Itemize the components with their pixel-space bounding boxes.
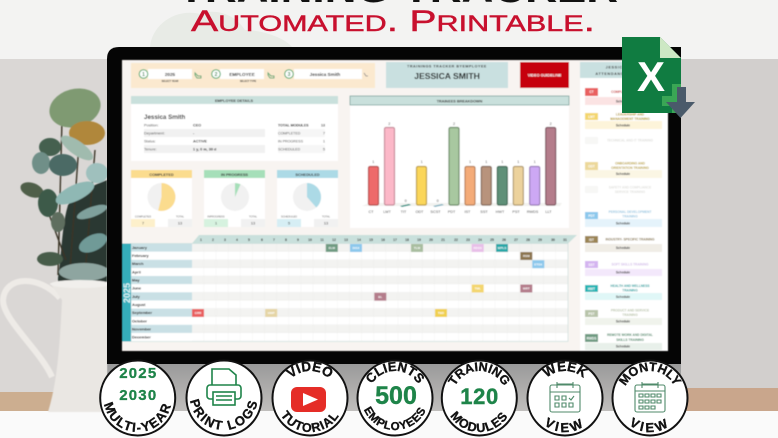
- panel: attendance list: HWT: [588, 287, 595, 291]
- panel: attendance list: Schedule: [616, 222, 630, 226]
- panel: yearly calendar: 18: [405, 238, 409, 242]
- panel: yearly calendar: September: [132, 310, 153, 315]
- chart: trainees breakdown: CT: [368, 210, 374, 214]
- panel: employee details: COMPLETED: [278, 132, 301, 136]
- badge: clients and employees: CLIENTS: [366, 362, 424, 383]
- panel: selector bar: 3: [288, 72, 291, 78]
- panel: attendance list: SOFT SKILLS TRAINING: [611, 262, 649, 266]
- badge: multi-year: 2025: [119, 365, 156, 382]
- panel: yearly calendar: 6: [261, 238, 263, 242]
- chart: trainees breakdown: LLT: [545, 210, 552, 214]
- panel: attendance list: Schedule: [616, 172, 630, 176]
- panel: employee details: TOTAL MODULES: [278, 124, 309, 128]
- badge: monthly view: VIEW: [632, 417, 667, 432]
- chart: trainees breakdown: TIT: [401, 210, 407, 214]
- panel: yearly calendar: 2: [212, 238, 214, 242]
- panel: yearly calendar: 8: [285, 238, 287, 242]
- panel: employee details: 1: [323, 140, 325, 144]
- panel: attendance list: ORIENTATION TRAINING: [611, 166, 649, 170]
- panel: yearly calendar: GRR: [195, 311, 202, 315]
- panel: attendance list: TRAINING: [622, 288, 638, 292]
- panel: employee details: 7: [323, 132, 325, 136]
- chart: trainees breakdown: LMT: [383, 210, 391, 214]
- panel: yearly calendar: February: [132, 253, 149, 258]
- badge: clients and employees: 500: [375, 382, 417, 410]
- panel: attendance list: SAFETY AND COMPLIANCE: [609, 186, 651, 190]
- panel: yearly calendar: 31: [563, 238, 567, 242]
- button: video guideline: VIDEO GUIDELINE: [528, 74, 562, 78]
- panel: yearly calendar: 25: [490, 238, 494, 242]
- panel: yearly calendar: 29: [538, 238, 542, 242]
- panel: attendance list: PRODUCT AND SERVICE: [611, 308, 649, 312]
- chart: trainees breakdown: 1: [534, 160, 536, 164]
- badge: training modules: MODULES: [450, 410, 507, 432]
- badge: monthly view: MONTHLY: [618, 362, 682, 386]
- chart: trainees breakdown: TRAINEES BREAKDOWN: [437, 100, 483, 104]
- panel: yearly calendar: 9: [297, 238, 299, 242]
- panel: yearly calendar: November: [132, 326, 152, 332]
- panel: attendance list: ATTENDANCE SUMMARY: [595, 72, 653, 76]
- panel: yearly calendar: WPLS: [498, 246, 506, 250]
- badge: week view: VIEW: [546, 417, 582, 432]
- panel: yearly calendar: January: [132, 245, 148, 250]
- panel: scheduled card: SCHEDULED: [295, 172, 320, 177]
- panel: yearly calendar: May: [132, 278, 140, 282]
- panel: yearly calendar: ELM: [329, 246, 335, 250]
- chart: trainees breakdown: 0: [437, 199, 439, 203]
- chart: trainees breakdown: 0: [405, 199, 407, 203]
- panel: selector bar: SELECT YEAR: [162, 80, 179, 83]
- panel: selector bar: SELECT TYPE: [240, 80, 257, 83]
- panel: attendance list: SKILLS TRAINING: [616, 338, 644, 342]
- panel: yearly calendar: June: [132, 286, 142, 290]
- panel: in progress card: INPROGRESS: [207, 214, 225, 218]
- panel: yearly calendar: 28: [526, 238, 530, 242]
- panel: attendance list: Schedule: [616, 295, 630, 299]
- badge: multi-year: [99, 360, 176, 436]
- panel: employee details: ACTIVE: [193, 140, 207, 144]
- panel: yearly calendar: 15: [369, 238, 373, 242]
- panel: yearly calendar: 14: [357, 238, 361, 242]
- panel: employee details: -: [193, 132, 195, 136]
- badge: print logs: [186, 360, 262, 436]
- chart: trainees breakdown: IST: [465, 210, 471, 214]
- chart: trainees breakdown: 2: [453, 122, 455, 126]
- panel: completed card: 13: [178, 222, 182, 226]
- panel: yearly calendar: TML: [475, 287, 481, 291]
- panel: yearly calendar: 2025: [122, 283, 132, 303]
- chart: trainees breakdown: 1: [517, 160, 519, 164]
- panel: yearly calendar: December: [132, 334, 151, 340]
- panel: completed card: COMPLETED: [135, 214, 151, 218]
- chart: trainees breakdown: PDT: [448, 210, 456, 214]
- badge: training modules: TRAINING: [448, 362, 510, 385]
- panel: attendance list: Schedule: [616, 320, 630, 324]
- panel: attendance list: LMT: [588, 115, 595, 119]
- panel: yearly calendar: TLM: [414, 246, 421, 250]
- subtitle: automated printable: A UTOMATED . P RINTABLE .: [191, 5, 595, 38]
- chart: trainees breakdown: 1: [469, 160, 471, 164]
- chart: trainees breakdown: 1: [501, 160, 503, 164]
- panel: employee details: CEO: [193, 124, 201, 128]
- panel: attendance list: Schedule: [616, 270, 630, 274]
- panel: yearly calendar: 3: [224, 238, 226, 242]
- panel: scheduled card: 5: [288, 222, 290, 226]
- panel: yearly calendar: March: [132, 261, 144, 266]
- panel: yearly calendar: ETDX: [534, 262, 542, 266]
- badge: clients and employees: [356, 360, 434, 436]
- panel: selector bar: 1: [142, 72, 145, 78]
- panel: attendance list: JESSICA SMITH: [606, 66, 642, 70]
- panel: attendance list: RWDS: [587, 336, 596, 340]
- panel: completed card: TOTAL: [176, 214, 185, 218]
- panel: yearly calendar: 7: [273, 238, 275, 242]
- chart: trainees breakdown: SST: [480, 210, 488, 214]
- panel: selector bar: EMPLOYEE: [229, 72, 255, 77]
- chart: trainees breakdown: 2: [388, 122, 390, 126]
- panel: completed card: 7: [142, 222, 144, 226]
- panel: yearly calendar: 19: [417, 238, 421, 242]
- panel: attendance list: PDT: [588, 214, 595, 218]
- badge: training modules: 120: [460, 384, 498, 409]
- panel: employee details: IN PROGRESS: [278, 140, 304, 144]
- panel: attendance list: Schedule: [616, 246, 630, 250]
- panel: yearly calendar: HWP: [268, 311, 275, 315]
- panel: selector bar: Jessica Smith: [310, 72, 341, 77]
- panel: attendance list: SERVICE TRAINING: [615, 190, 646, 194]
- panel: in progress card: 13: [251, 222, 255, 226]
- chart: trainees breakdown: [350, 96, 569, 228]
- panel: attendance list: Schedule: [616, 124, 630, 128]
- panel: attendance list: ODT: [588, 164, 595, 168]
- panel: attendance list: TECHNICAL AND IT TRAINING: [607, 138, 654, 142]
- panel: selector bar: [131, 63, 375, 88]
- dashboard screen: [122, 60, 668, 351]
- panel: yearly calendar: 27: [514, 238, 518, 242]
- panel: attendance list: HEALTH AND WELLNESS: [611, 284, 649, 288]
- panel: yearly calendar: 22: [454, 238, 458, 242]
- badge: print logs: PRINT LOGS: [190, 398, 257, 430]
- plant and white jug photo: [3, 83, 110, 412]
- heading: tracker by employee: TRAININGS TRACKER BYEMPLOYEE: [407, 64, 487, 68]
- badge: multi-year: MULTI-YEAR: [104, 402, 172, 432]
- panel: yearly calendar: 5: [248, 238, 250, 242]
- panel: yearly calendar: BL: [378, 295, 382, 299]
- panel: yearly calendar: 26: [502, 238, 506, 242]
- panel: yearly calendar: [122, 235, 577, 342]
- panel: attendance list: Schedule: [616, 100, 630, 104]
- panel: yearly calendar: July: [132, 294, 141, 299]
- badge: multi-year: 2030: [119, 387, 156, 404]
- panel: scheduled card: [277, 170, 338, 227]
- panel: scheduled card: 13: [324, 222, 328, 226]
- panel: attendance list: TRAINING: [622, 214, 638, 218]
- panel: yearly calendar: RDSS: [474, 246, 482, 250]
- panel: completed card: COMPLETED: [149, 172, 174, 177]
- panel: attendance list: [580, 62, 668, 351]
- badge: week view: WEEK: [542, 362, 588, 378]
- panel: attendance list: ONBOARDING AND: [615, 162, 646, 166]
- panel: yearly calendar: 24: [478, 238, 482, 242]
- panel: attendance list: INDUSTRY- SPECIFIC TRAINING: [606, 238, 655, 242]
- panel: in progress card: IN PROGRESS: [221, 172, 248, 177]
- panel: attendance list: TRAINING: [622, 313, 638, 317]
- panel: employee details: Position:: [144, 124, 159, 128]
- panel: employee details: 13: [321, 124, 325, 128]
- badge: training modules: [440, 360, 518, 436]
- panel: employee details: Jessica Smith: [144, 114, 185, 121]
- badge: video tutorial: [272, 360, 348, 436]
- badge: monthly view: [612, 360, 688, 436]
- panel: attendance list: PERSONAL DEVELOPMENT: [609, 210, 651, 214]
- badge: clients and employees: EMPLOYEES: [364, 406, 426, 430]
- badge: video tutorial: VIDEO: [286, 362, 332, 377]
- panel: attendance list: REMOTE WORK AND DIGITAL: [607, 333, 653, 337]
- panel: yearly calendar: 13: [344, 238, 348, 242]
- panel: yearly calendar: DISX: [352, 246, 360, 250]
- chart: trainees breakdown: RWDS: [527, 210, 539, 214]
- panel: scheduled card: TOTAL: [322, 214, 331, 218]
- icon: excel file with download arrow: X: [637, 53, 665, 100]
- panel: employee details: 5: [323, 148, 325, 152]
- panel: yearly calendar: RSM: [523, 254, 530, 258]
- panel: employee details: SCHEDULED: [278, 148, 301, 152]
- panel: completed card: [131, 170, 192, 227]
- panel: yearly calendar: 30: [551, 238, 555, 242]
- badge: video tutorial: TUTORIAL: [282, 410, 339, 432]
- panel: attendance list: IST: [589, 238, 594, 242]
- panel: employee details: EMPLOYEE DETAILS: [215, 99, 254, 103]
- panel: yearly calendar: April: [132, 270, 141, 274]
- panel: attendance list: LEADERSHIP AND: [616, 112, 645, 116]
- heading: tracker by employee: JESSICA SMITH: [414, 71, 480, 81]
- panel: selector bar: 2: [215, 72, 218, 78]
- chart: trainees breakdown: ODT: [415, 210, 424, 214]
- laptop monitor frame: [107, 47, 681, 364]
- panel: yearly calendar: 1: [200, 238, 202, 242]
- panel: attendance list: PST: [588, 312, 595, 316]
- panel: yearly calendar: 10: [308, 238, 312, 242]
- panel: in progress card: TOTAL: [249, 214, 258, 218]
- panel: yearly calendar: 21: [441, 238, 445, 242]
- chart: trainees breakdown: 1: [421, 160, 423, 164]
- chart: trainees breakdown: PST: [512, 210, 520, 214]
- chart: trainees breakdown: 1: [372, 160, 374, 164]
- panel: attendance list: SST: [588, 263, 595, 267]
- chart: trainees breakdown: HWT: [496, 210, 505, 214]
- panel: attendance list: CT: [589, 90, 594, 94]
- panel: yearly calendar: 4: [236, 238, 238, 242]
- heading: tracker by employee: [386, 62, 508, 88]
- badge: week view: [526, 360, 604, 436]
- panel: in progress card: 1: [215, 222, 217, 226]
- panel: employee details: [131, 96, 338, 161]
- panel: yearly calendar: 16: [381, 238, 385, 242]
- icon: excel file with download arrow: [622, 37, 695, 118]
- panel: yearly calendar: 17: [393, 238, 397, 242]
- panel: attendance list: Schedule: [616, 344, 630, 348]
- panel: attendance list: MANAGEMENT TRAINING: [610, 117, 650, 121]
- panel: employee details: Status:: [144, 140, 156, 144]
- button: video guideline: [520, 62, 569, 88]
- chart: trainees breakdown: 1: [485, 160, 487, 164]
- panel: yearly calendar: WRT: [523, 287, 530, 291]
- chart: trainees breakdown: SCST: [430, 210, 441, 214]
- panel: employee details: Department:: [144, 132, 165, 136]
- panel: yearly calendar: 12: [332, 238, 336, 242]
- panel: yearly calendar: October: [132, 318, 147, 324]
- panel: in progress card: [204, 170, 265, 227]
- panel: yearly calendar: 20: [429, 238, 433, 242]
- panel: employee details: Tenure:: [144, 148, 157, 152]
- panel: yearly calendar: August: [132, 302, 146, 307]
- panel: yearly calendar: 23: [466, 238, 470, 242]
- panel: yearly calendar: TBD: [438, 311, 445, 315]
- panel: attendance list: COMPLIANCE TRAINING: [611, 90, 649, 94]
- panel: selector bar: 2025: [165, 72, 176, 77]
- panel: yearly calendar: 11: [320, 238, 324, 242]
- panel: scheduled card: SCHEDULED: [281, 214, 297, 218]
- chart: trainees breakdown: 2: [550, 122, 552, 126]
- panel: employee details: 1 y, 0 m, 30 d: [193, 148, 217, 152]
